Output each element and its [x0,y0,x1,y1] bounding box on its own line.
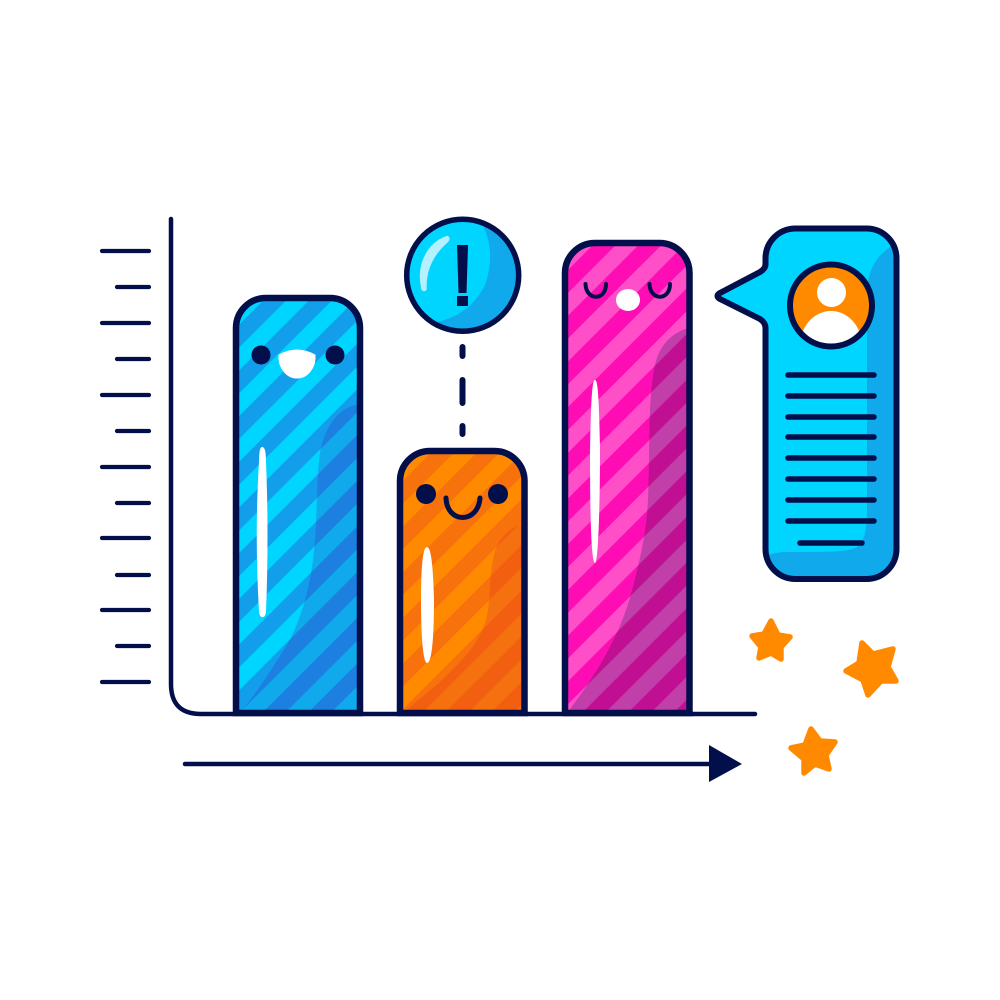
orange bar face [416,484,508,518]
bar: orange [396,448,528,716]
pink bar face [586,284,670,311]
chart axes [171,219,755,714]
speech bubble [710,222,905,585]
x axis arrow [185,745,742,782]
bar: blue [232,294,364,716]
orange bar highlight [421,547,434,663]
blue bar highlight [257,447,268,617]
dashed connector [460,347,466,434]
text lines [788,375,874,543]
illustration: cute bar chart [100,216,900,782]
badge glint [421,237,449,290]
alert badge [407,219,530,340]
pink bar highlight [590,380,600,563]
bar: pink [562,240,693,716]
y axis ticks [102,251,149,682]
avatar [787,262,875,350]
stars [752,621,896,773]
blue bar face [252,346,344,378]
exclamation mark [457,245,468,306]
